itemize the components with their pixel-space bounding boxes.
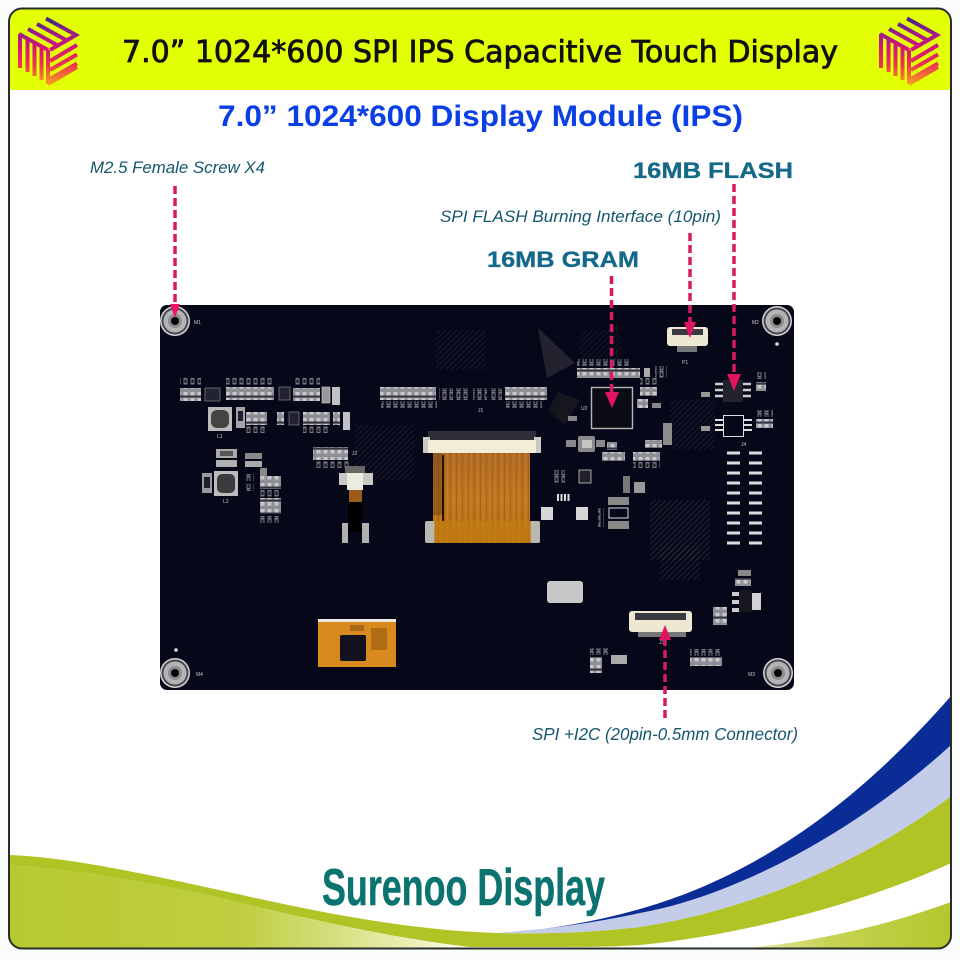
label: M2.5 screw: M2.5 Female Screw X4 — [90, 158, 265, 177]
label: SPI FLASH burning interface: SPI FLASH Burning Interface (10pin) — [440, 207, 721, 226]
arrow: screw — [170, 186, 180, 318]
silkscreen reference labels: M3 — [748, 672, 755, 678]
silkscreen reference labels: L1 — [217, 434, 223, 440]
icon: left logo cube — [19, 18, 77, 84]
wave: bottom-right green — [747, 902, 951, 948]
subtitle: 7.0” 1024*600 Display Module (IPS) — [218, 100, 743, 133]
title: 7.0” 1024*600 SPI IPS Capacitive Touch Display — [122, 35, 838, 70]
silkscreen reference labels: M2 — [752, 320, 759, 326]
faint board traces — [355, 328, 715, 580]
J2 connector and small ribbon — [339, 466, 373, 543]
bottom waves — [9, 696, 951, 948]
touch flex with chip — [318, 619, 396, 667]
lower right parts — [590, 570, 761, 673]
silkscreen reference labels: M4 — [196, 672, 203, 678]
wave: lavender band — [497, 745, 951, 933]
M4 screw — [160, 658, 190, 688]
silkscreen reference labels: L2 — [223, 499, 229, 505]
silkscreen reference labels: P1 — [682, 360, 688, 366]
wave: navy band — [497, 696, 951, 933]
M3 screw — [763, 658, 793, 688]
silver pad — [547, 581, 583, 603]
GRAM chip and neighbours — [566, 359, 672, 468]
20 pin connector J3 — [629, 611, 692, 637]
arrow: SPI connector — [659, 625, 671, 718]
silkscreen reference labels: U2 — [581, 406, 588, 412]
board body — [160, 305, 794, 690]
silkscreen reference labels: J1 — [478, 408, 484, 414]
panel: circuit board — [160, 305, 794, 690]
screw holes — [160, 306, 793, 688]
arrow: GRAM — [605, 276, 619, 408]
header band — [10, 10, 950, 90]
label: SPI I2C connector: SPI +I2C (20pin-0.5mm Connector) — [532, 724, 798, 744]
wave: green band — [9, 796, 951, 947]
main FPC ribbon connector — [423, 431, 541, 543]
wave: left hill fill — [9, 865, 470, 948]
arrow: FLASH — [727, 184, 741, 391]
silkscreen reference labels: J2 — [352, 451, 358, 457]
silkscreen reference labels — [194, 320, 759, 678]
silkscreen reference labels: J4 — [741, 442, 746, 448]
lower middle parts — [541, 470, 629, 529]
M1 screw — [160, 306, 190, 336]
M2 screw — [762, 306, 792, 336]
left component cluster — [180, 378, 350, 523]
J4 header pads — [727, 453, 762, 543]
silkscreen reference labels: M1 — [194, 320, 201, 326]
brand name: Surenoo Display — [322, 859, 605, 917]
arrow: burning interface — [684, 233, 696, 338]
flash chips and right parts — [623, 372, 773, 493]
icon: right logo cube — [880, 18, 938, 84]
resistor row above main connector — [380, 387, 547, 408]
label: 16MB GRAM: 16MB GRAM — [487, 247, 639, 272]
silkscreen reference labels: J3 — [659, 640, 664, 646]
label: 16MB FLASH: 16MB FLASH — [633, 158, 793, 183]
10 pin connector P1 — [667, 327, 708, 352]
